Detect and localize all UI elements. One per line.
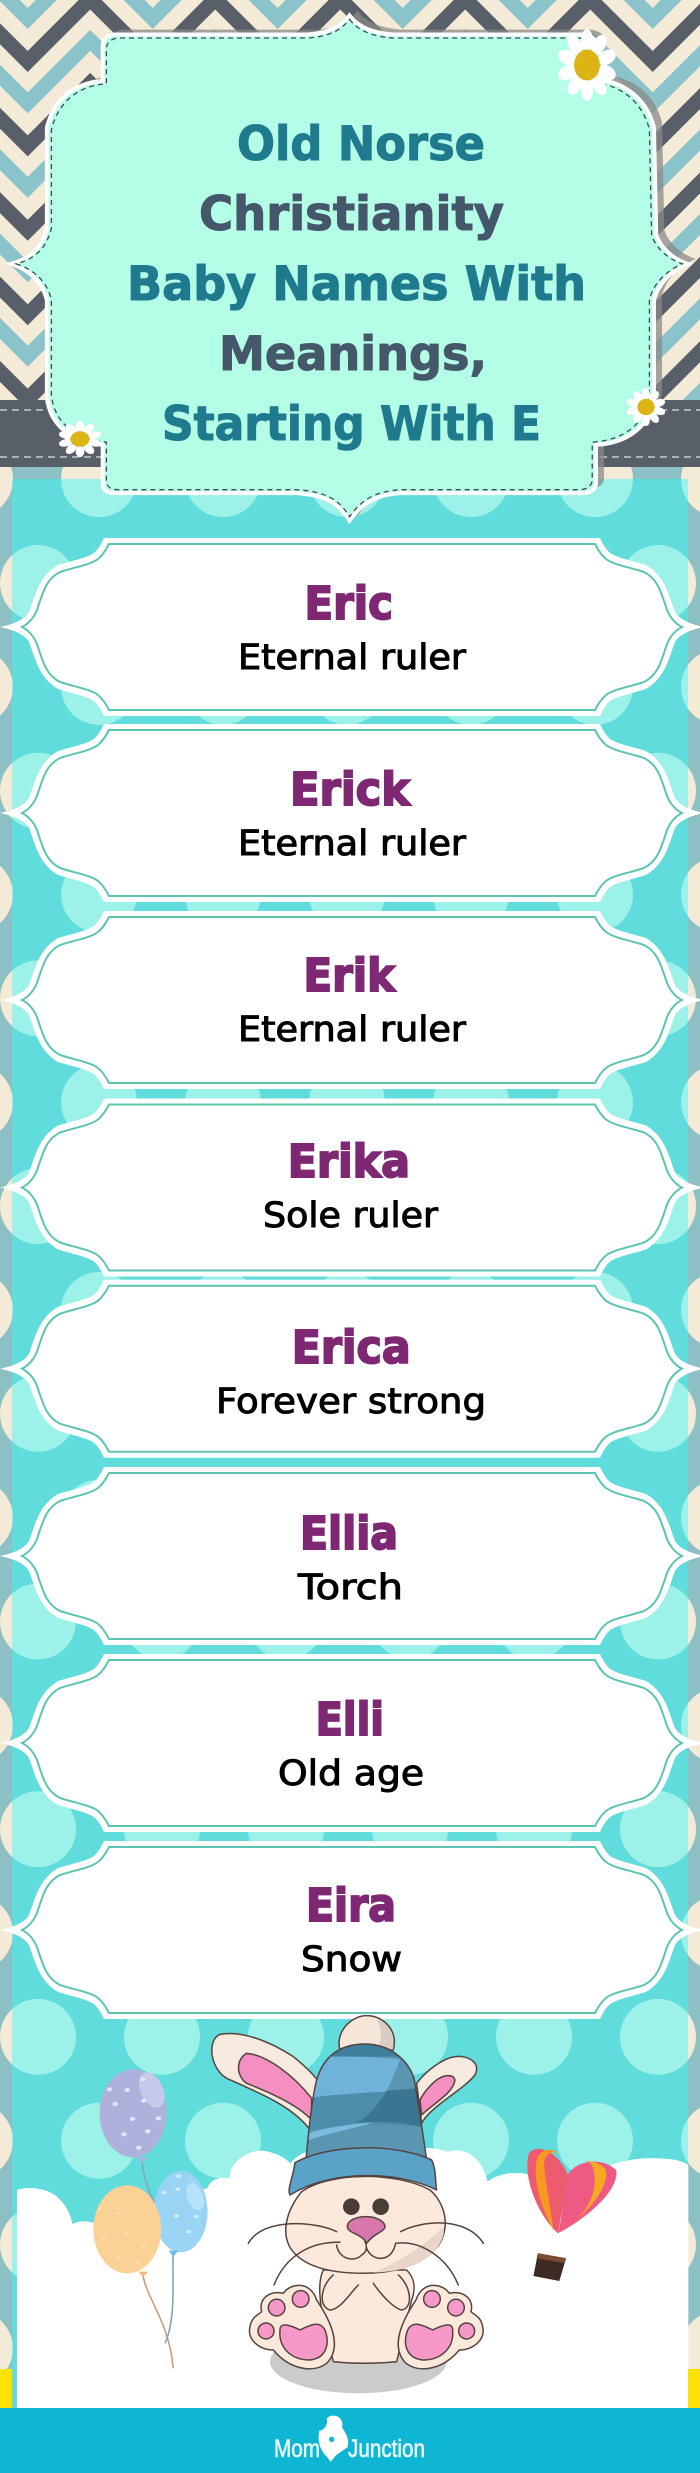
panel: Ellia: Ellia	[300, 1507, 398, 1560]
icon: daisy bottom left	[58, 421, 102, 457]
slate ribbon band	[0, 400, 700, 467]
icon: daisy bottom right	[626, 388, 666, 426]
white cloud	[17, 2148, 688, 2408]
footer bar	[0, 2408, 700, 2473]
panel: Elli	[0, 1654, 700, 1832]
panel: Erik	[0, 911, 700, 1089]
right ear	[417, 2056, 477, 2123]
panel: Elli: Elli	[316, 1693, 384, 1746]
panel: Erick: Eternal ruler	[238, 824, 467, 864]
bunny illustration	[212, 2016, 483, 2393]
panel: Eric: Eternal ruler	[238, 638, 467, 678]
panel: Eric: Eric	[304, 577, 393, 630]
panel: Ellia	[0, 1467, 700, 1645]
panel: Eric	[0, 538, 700, 716]
left foot	[249, 2285, 334, 2369]
title: Meanings,	[219, 327, 487, 382]
title: Christianity	[199, 187, 504, 242]
title: Old Norse	[237, 117, 485, 172]
arms	[322, 2275, 409, 2310]
icon: daisy top right	[557, 29, 617, 101]
balloons	[93, 2069, 208, 2368]
hot air balloon	[527, 2149, 616, 2281]
background: polka dot side strip	[0, 441, 700, 2408]
background: teal polka dot panel	[0, 441, 700, 2408]
panel: Erica	[0, 1280, 700, 1458]
title: Starting With E	[162, 397, 541, 452]
panel: Elli: Old age	[278, 1754, 424, 1794]
panel: Erick	[0, 724, 700, 902]
panel: Erick: Erick	[290, 763, 411, 816]
right foot	[398, 2285, 483, 2369]
shadow	[270, 2330, 447, 2393]
panel: Erica: Forever strong	[216, 1382, 486, 1422]
logo: MomJunction	[274, 2416, 425, 2463]
panel: Erik: Eternal ruler	[238, 1010, 467, 1050]
panel: Erika	[0, 1098, 700, 1276]
title	[127, 117, 586, 452]
logo: MomJunction: Junction	[348, 2435, 425, 2463]
panel: Eira: Snow	[301, 1940, 402, 1980]
title: Baby Names With	[127, 257, 586, 312]
panel: Eira: Eira	[306, 1879, 396, 1932]
yellow side accents	[0, 2369, 700, 2408]
background: chevron pattern	[0, 0, 700, 440]
panel: Erica: Erica	[292, 1321, 411, 1374]
logo: MomJunction: Mom	[274, 2435, 320, 2463]
panel: Erik: Erik	[304, 949, 396, 1002]
left ear	[212, 2033, 317, 2130]
panel: Ellia: Torch	[297, 1568, 403, 1608]
body	[320, 2270, 414, 2363]
title plaque	[11, 11, 695, 521]
head	[248, 2176, 483, 2285]
panel: Erika: Erika	[288, 1135, 410, 1188]
pompom	[339, 2016, 394, 2050]
knit hat	[289, 2040, 437, 2195]
panel: Eira	[0, 1841, 700, 2019]
panel: Erika: Sole ruler	[263, 1196, 439, 1236]
